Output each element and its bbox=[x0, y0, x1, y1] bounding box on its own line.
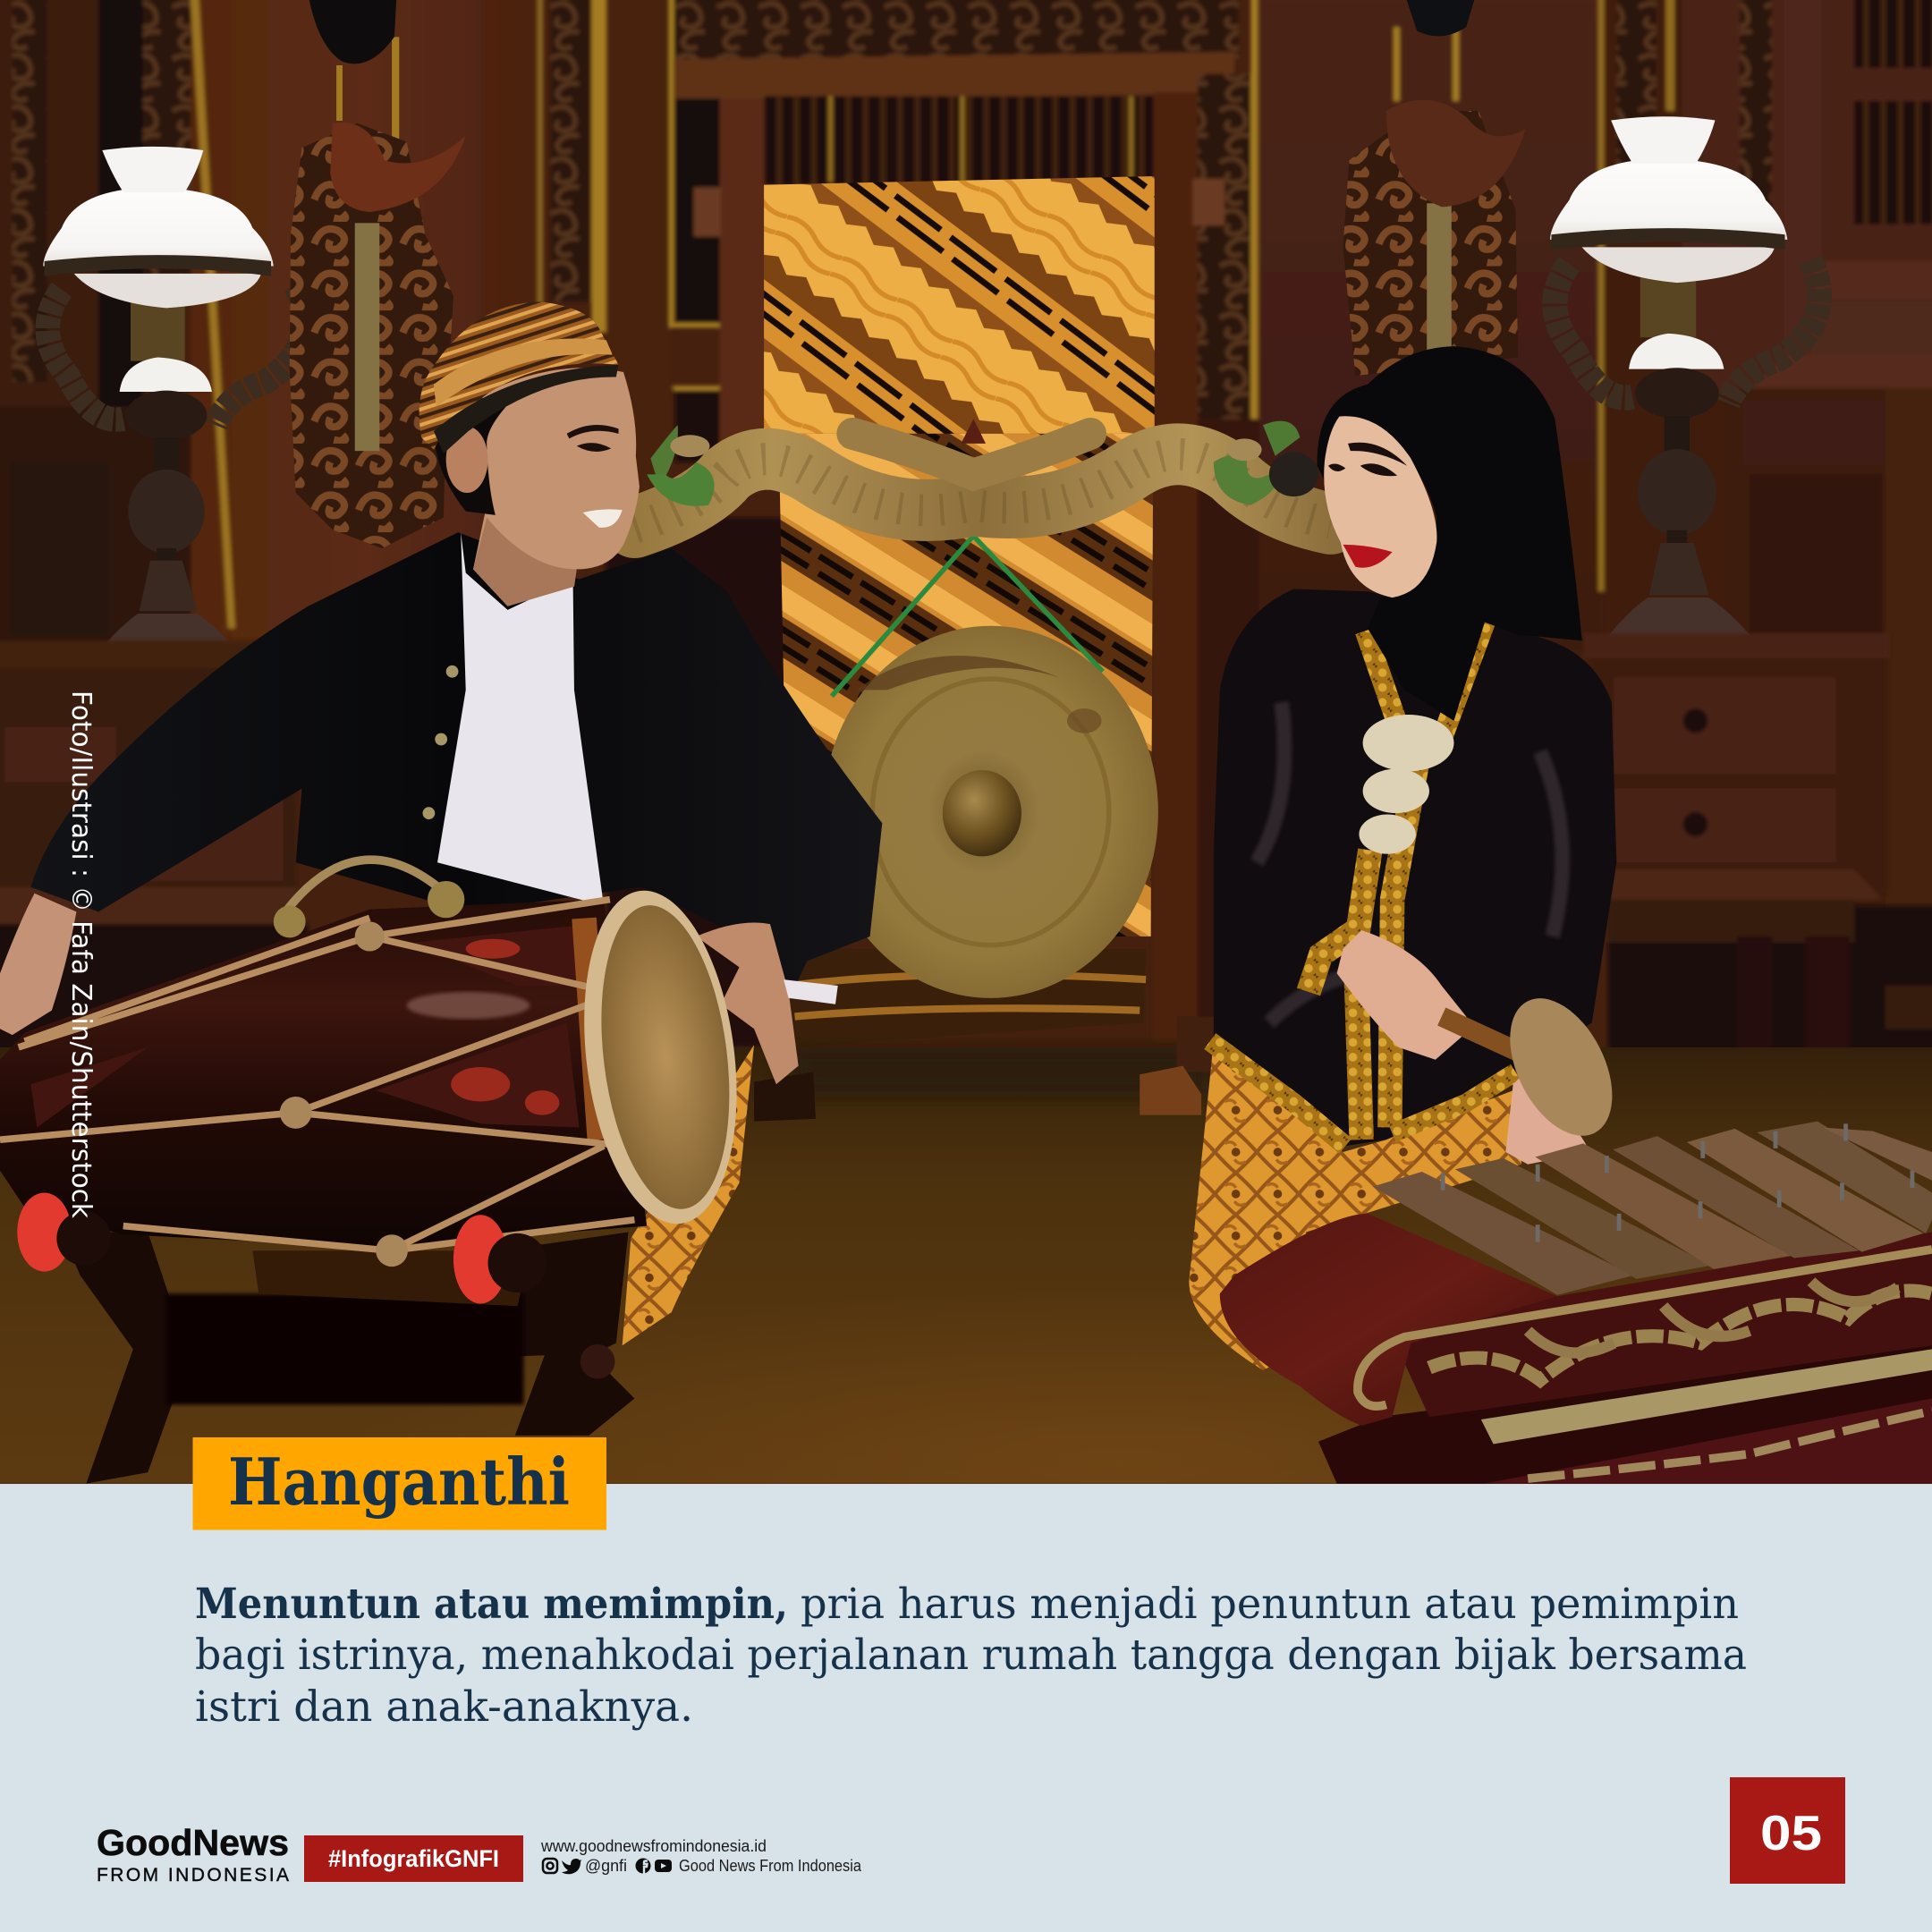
saron: gold rail and scroll bbox=[1358, 1250, 1932, 1406]
left carved wall ornament bbox=[290, 0, 466, 548]
man: neck shadow bbox=[473, 518, 577, 606]
kendang drum on carved stand bbox=[0, 860, 754, 1484]
drum stand bbox=[62, 1233, 634, 1484]
icon: instagram bbox=[543, 1859, 557, 1873]
gong with green strings bbox=[754, 536, 1214, 1122]
woman: batik skirt bbox=[1189, 1041, 1521, 1370]
woman: medallions bbox=[1359, 715, 1454, 854]
body text bbox=[195, 1580, 1747, 1732]
red end caps bbox=[17, 1192, 508, 1303]
body text: istri dan anak-anaknya. bbox=[195, 1682, 693, 1732]
batik knee behind the drum bbox=[623, 1045, 754, 1345]
saron: front carved panel bbox=[1393, 1247, 1932, 1417]
man: black jacket bbox=[30, 532, 882, 1001]
man: cuff bbox=[784, 979, 838, 1004]
saron: cream strip bbox=[1481, 1349, 1932, 1444]
saron: key pins bbox=[1443, 1123, 1912, 1242]
woman: eyes and brow bbox=[1328, 443, 1407, 476]
carpet floor bbox=[0, 1047, 1932, 1484]
body text: Menuntun atau memimpin, bbox=[195, 1580, 788, 1629]
man: white shirt bbox=[437, 532, 604, 905]
man in Javanese attire bbox=[0, 301, 882, 1084]
woman: lips bbox=[1343, 545, 1393, 568]
website and social handles bbox=[540, 1837, 862, 1875]
drum highlight bbox=[407, 992, 530, 1019]
title badge bbox=[193, 1437, 606, 1530]
logo: GoodNews from Indonesia: GoodNews bbox=[97, 1822, 289, 1863]
woman in kebaya and hijab bbox=[1189, 346, 1633, 1370]
saron: red scroll end bbox=[1220, 1214, 1557, 1426]
logo: GoodNews from Indonesia bbox=[97, 1822, 289, 1885]
icon: facebook bbox=[635, 1859, 651, 1874]
drum ropes bbox=[0, 900, 634, 1250]
drum carved red panels bbox=[30, 924, 591, 1127]
man: left hand bbox=[0, 894, 76, 1035]
page number box bbox=[1730, 1777, 1845, 1884]
right carved wall ornament bbox=[1343, 0, 1525, 376]
photo base colour bbox=[0, 0, 1932, 1485]
woman: hand holding mallet bbox=[1337, 930, 1466, 1060]
man: jacket buttons bbox=[422, 665, 458, 819]
drum handle and bells bbox=[281, 860, 450, 918]
right table lamp bbox=[1550, 116, 1819, 640]
golden dragon gong stand beam bbox=[634, 419, 1331, 528]
man: smile bbox=[583, 509, 623, 528]
woman: hijab bbox=[1318, 346, 1582, 721]
woman: gold necklace trim bbox=[1210, 616, 1515, 1146]
website and social handles: @gnfi bbox=[585, 1857, 627, 1875]
left table lamp bbox=[43, 147, 304, 656]
right cabinet with drawers bbox=[1584, 633, 1932, 1047]
photo: couple playing Javanese gamelan instruments bbox=[0, 0, 1932, 1485]
hashtag tag: #InfografikGNFI bbox=[328, 1845, 499, 1872]
man: neck and face bbox=[473, 368, 640, 606]
man: hair bbox=[435, 406, 506, 515]
page number box: 05 bbox=[1760, 1805, 1822, 1860]
woman: velvet kebaya bbox=[1214, 589, 1616, 1146]
saron: lower base bbox=[1318, 1343, 1932, 1484]
drum body bbox=[0, 900, 647, 1247]
website and social handles: www.goodnewsfromindonesia.id bbox=[540, 1837, 767, 1855]
woman: mallet bbox=[1442, 981, 1633, 1152]
man: right hand bbox=[696, 922, 799, 1084]
icon: youtube bbox=[655, 1860, 672, 1872]
man: blangkon headdress bbox=[419, 301, 619, 450]
title: Hanganthi bbox=[228, 1444, 570, 1520]
hashtag tag bbox=[304, 1835, 523, 1882]
bottom panel background bbox=[0, 1484, 1932, 1932]
man: eye and brow bbox=[567, 425, 619, 452]
body text: bagi istrinya, menahkodai perjalanan rumah tangga dengan bijak bersama bbox=[195, 1631, 1747, 1680]
man: ear bbox=[446, 427, 488, 493]
icon: twitter bbox=[562, 1859, 581, 1874]
photo credit: Foto/Ilustrasi : © Fafa Zain/Shutterstock bbox=[65, 691, 97, 1219]
logo: GoodNews from Indonesia: FROM INDONESIA bbox=[97, 1865, 289, 1885]
saron metallophone bbox=[1220, 1122, 1932, 1485]
saron: bronze keys bbox=[1373, 1122, 1932, 1295]
carved wooden wall background bbox=[0, 0, 1932, 1047]
woman: face bbox=[1324, 416, 1436, 597]
drum head bbox=[566, 882, 754, 1233]
body text: pria harus menjadi penuntun atau pemimpin bbox=[801, 1580, 1739, 1629]
woman: lower hand bbox=[1505, 1070, 1589, 1165]
left cabinet bbox=[0, 640, 308, 1060]
website and social handles: Good News From Indonesia bbox=[679, 1857, 862, 1875]
batik cloth hanging behind the gong bbox=[764, 176, 1155, 1047]
